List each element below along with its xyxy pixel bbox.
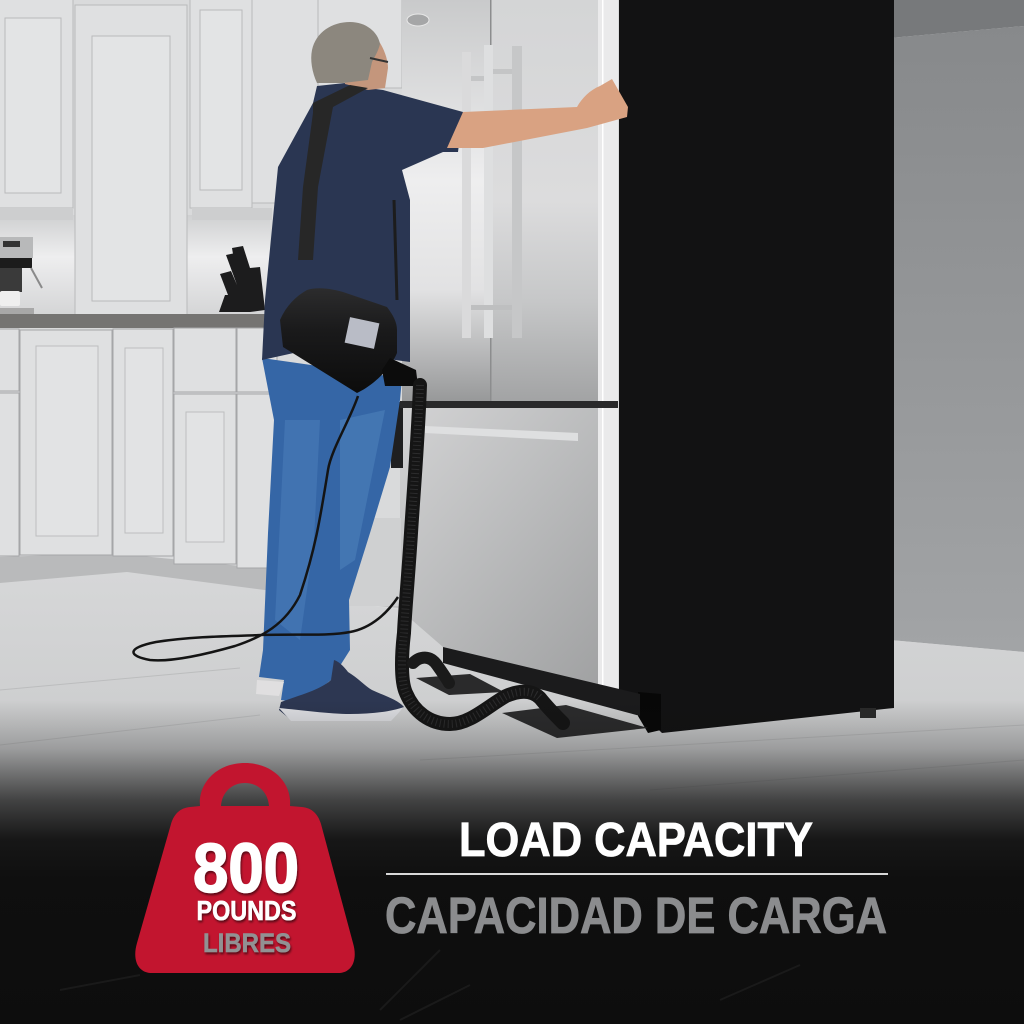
left shoe [256, 680, 284, 696]
jeans [259, 358, 402, 703]
badge number: 800 [193, 829, 299, 907]
heading english: LOAD CAPACITY [459, 814, 813, 867]
upper cabinets [0, 0, 402, 315]
countertop [0, 314, 265, 328]
right strap [394, 200, 397, 300]
head [340, 40, 388, 90]
badge unit: POUNDS [196, 895, 296, 926]
black refrigerator side [619, 0, 894, 733]
stainless steel refrigerator doors [349, 0, 618, 692]
icon: coffee machine [0, 237, 42, 314]
blower hose [402, 385, 563, 724]
glasses [370, 58, 388, 62]
hair [311, 22, 380, 83]
icon: knife block [219, 246, 265, 312]
shoulder strap [298, 85, 368, 260]
ground scratches [60, 950, 800, 1020]
lifting base and air mats [416, 647, 648, 738]
power cord [133, 396, 398, 660]
person [256, 22, 628, 721]
shirt [262, 83, 463, 362]
arm [447, 79, 628, 148]
electric blower [280, 288, 418, 393]
weight badge [135, 763, 355, 973]
lower cabinets [0, 328, 277, 568]
right shoe [279, 660, 404, 720]
bottom dark fade [0, 700, 1024, 1024]
badge unit spanish: LIBRES [203, 928, 291, 958]
heading spanish: CAPACIDAD DE CARGA [385, 887, 887, 944]
